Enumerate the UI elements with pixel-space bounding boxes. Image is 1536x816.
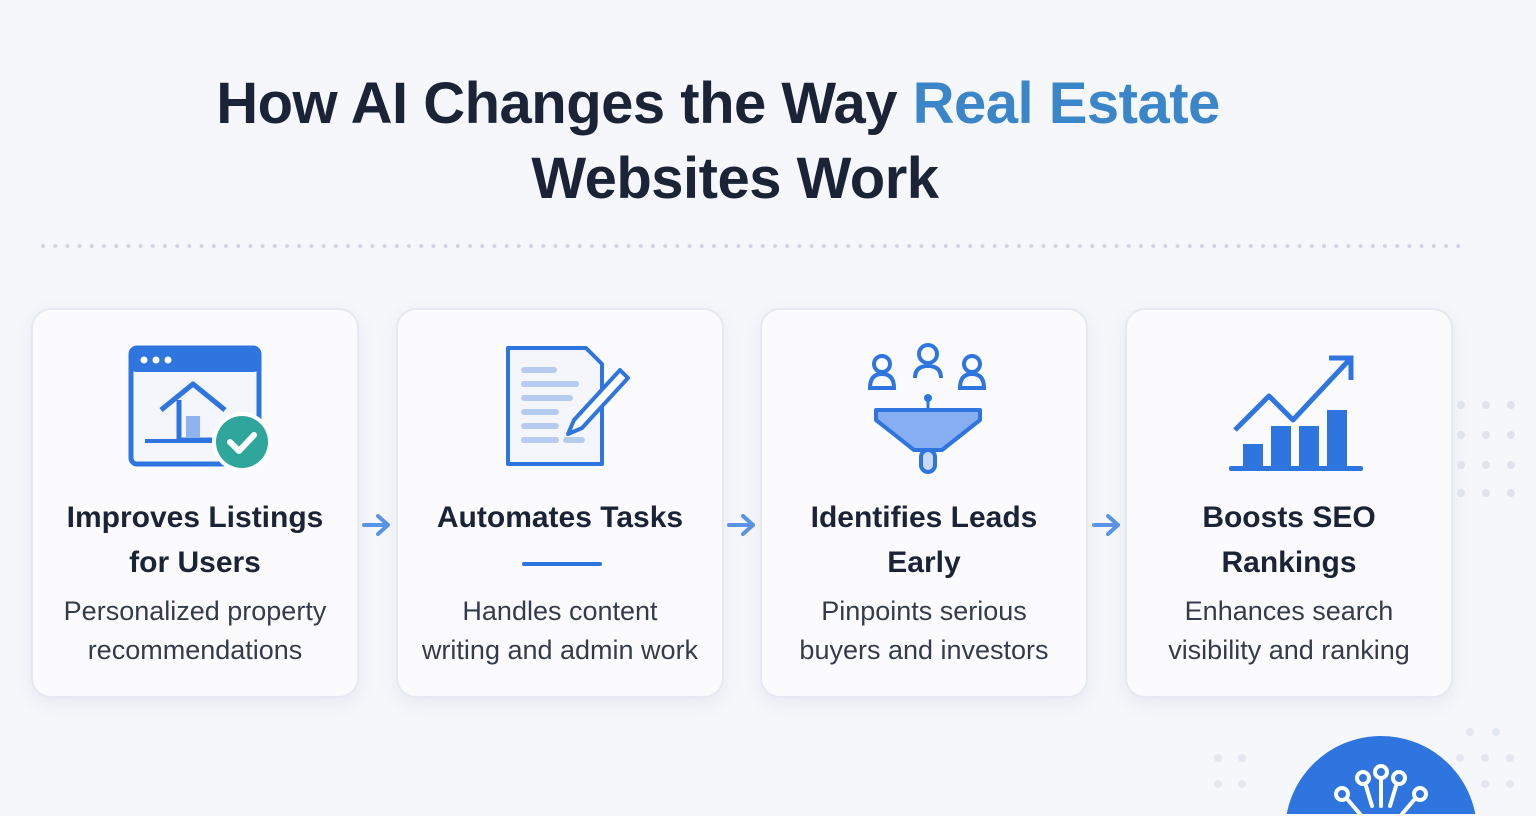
underline accent xyxy=(522,562,602,566)
heading xyxy=(1202,501,1376,579)
description: recommendations xyxy=(88,635,302,665)
icon: AI badge circle xyxy=(1214,728,1514,814)
decorative dots right xyxy=(1457,401,1515,497)
heading: for Users xyxy=(129,546,261,579)
description: Handles content xyxy=(462,596,658,626)
icon: funnel with people xyxy=(868,343,986,474)
heading: Early xyxy=(887,546,961,579)
arrow 1 xyxy=(362,514,390,536)
description xyxy=(422,596,698,665)
heading: Identifies Leads xyxy=(811,501,1037,534)
description: visibility and ranking xyxy=(1168,635,1410,665)
description: buyers and investors xyxy=(799,635,1049,665)
panel: improves listings xyxy=(31,308,359,698)
title: Websites Work xyxy=(531,146,939,211)
heading xyxy=(67,501,323,579)
heading: Improves Listings xyxy=(67,501,323,534)
panel: automates tasks xyxy=(396,308,724,698)
panel: boosts seo xyxy=(1125,308,1453,698)
heading xyxy=(811,501,1037,579)
description: writing and admin work xyxy=(422,635,698,665)
icon: document pencil xyxy=(506,346,630,466)
description xyxy=(64,596,326,665)
description xyxy=(799,596,1049,665)
description: Personalized property xyxy=(64,596,326,626)
arrow 2 xyxy=(727,514,756,536)
description: Enhances search xyxy=(1185,596,1393,626)
description: Pinpoints serious xyxy=(821,596,1027,626)
heading: Automates Tasks xyxy=(437,501,683,534)
icon: browser house check xyxy=(128,346,268,468)
description xyxy=(1168,596,1410,665)
panel: identifies leads xyxy=(760,308,1088,698)
heading: Rankings xyxy=(1221,546,1357,579)
title xyxy=(216,71,1220,211)
arrow 3 xyxy=(1092,514,1120,536)
title: How AI Changes the Way Real Estate xyxy=(216,71,1220,136)
heading: Boosts SEO xyxy=(1202,501,1376,534)
icon: bar chart growth xyxy=(1229,356,1363,471)
dotted divider xyxy=(41,244,1460,248)
